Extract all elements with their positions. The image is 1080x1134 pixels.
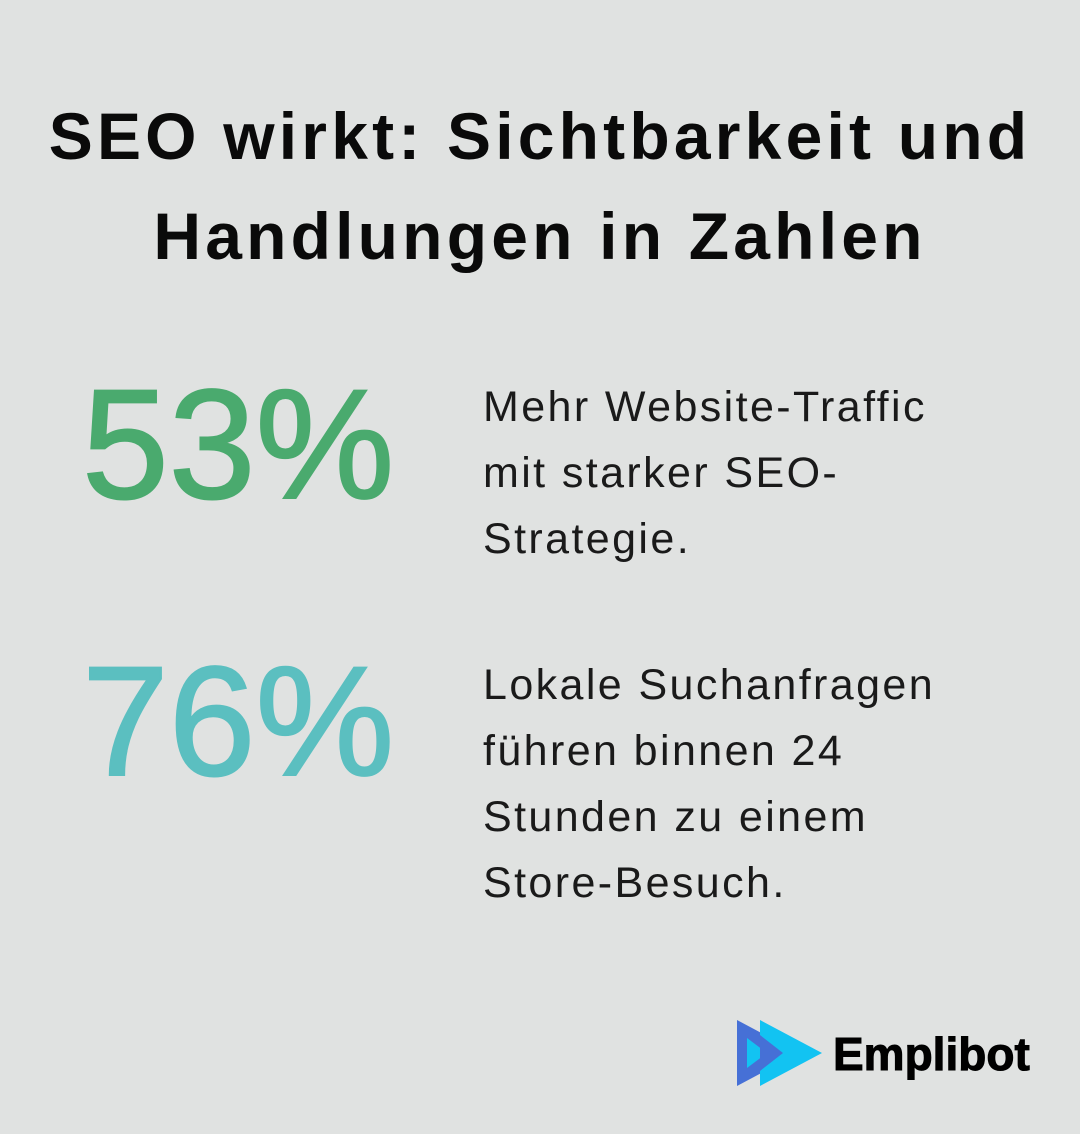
stat: 53%: 53% — [82, 358, 394, 532]
text: 53% description: Mehr Website-Traffic — [483, 383, 927, 431]
text: 76% description: Store-Besuch. — [483, 859, 787, 907]
text: 53% description — [483, 383, 927, 563]
stat: 76%: 76% — [82, 635, 394, 809]
logo: Emplibot: Emplibot — [833, 1028, 1030, 1080]
title: SEO wirkt: Sichtbarkeit und — [49, 99, 1031, 173]
text: 53% description: Strategie. — [483, 515, 691, 563]
text: 76% description — [483, 661, 935, 907]
text: 76% description: führen binnen 24 — [483, 727, 844, 775]
text: 76% description: Stunden zu einem — [483, 793, 868, 841]
text: 53% description: mit starker SEO- — [483, 449, 839, 497]
logo: Emplibot — [737, 1020, 1030, 1086]
title: Handlungen in Zahlen — [153, 199, 927, 273]
text: 76% description: Lokale Suchanfragen — [483, 661, 935, 709]
title — [49, 99, 1031, 273]
